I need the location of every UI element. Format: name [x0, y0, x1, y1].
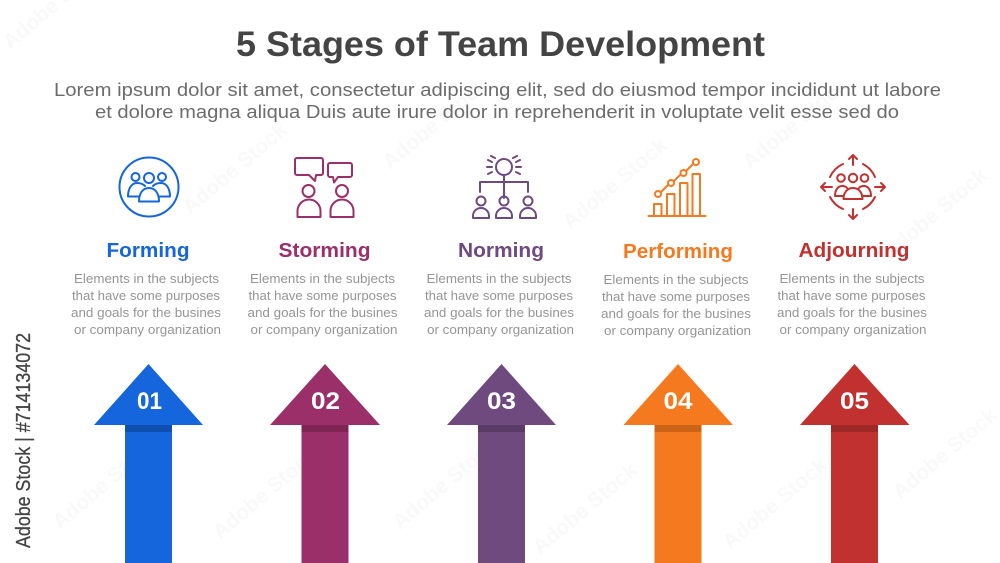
text: Adobe Stock	[718, 454, 832, 554]
panel: adjourning	[777, 155, 928, 563]
heading: performing: Performing	[623, 240, 733, 263]
arrow: 05	[800, 364, 910, 563]
description: performing: that have some purposes	[602, 289, 750, 304]
text: Adobe Stock	[378, 74, 492, 174]
description: norming	[424, 271, 575, 337]
text: Adobe Stock	[528, 459, 642, 559]
description: storming: or company organization	[250, 322, 398, 337]
heading: forming: Forming	[106, 239, 190, 262]
arrow: 03	[447, 364, 556, 563]
subtitle text: Lorem ipsum dolor sit amet, consectetur adipiscing elit, sed do eiusmod tempor incididunt ut labore	[54, 79, 941, 100]
description: adjourning: Elements in the subjects	[780, 271, 925, 286]
description: storming: Elements in the subjects	[250, 271, 396, 286]
description: forming: or company organization	[74, 322, 221, 337]
heading: storming: Storming	[278, 239, 370, 262]
description: adjourning	[777, 271, 928, 337]
description: performing: Elements in the subjects	[604, 272, 749, 287]
description: norming: Elements in the subjects	[426, 271, 572, 286]
arrow: 04: 04	[664, 388, 693, 415]
text: Adobe Stock	[558, 134, 672, 234]
arrow: 05: 05	[840, 388, 869, 415]
title: 5 Stages of Team Development	[236, 25, 765, 64]
panel: storming	[248, 158, 398, 563]
subtitle text	[54, 79, 941, 122]
text: Adobe Stock	[388, 434, 502, 534]
description: storming	[248, 271, 398, 337]
icon: growth bar chart	[648, 159, 706, 216]
description: forming	[71, 271, 222, 337]
text: Adobe Stock	[48, 434, 162, 534]
icon: team with outward arrows	[821, 155, 885, 219]
arrow: 02: 02	[311, 388, 340, 415]
description: adjourning: that have some purposes	[778, 288, 926, 303]
icon: leader and team hierarchy	[473, 156, 536, 218]
description: forming: that have some purposes	[72, 288, 220, 303]
heading: norming: Norming	[458, 239, 544, 262]
panel: forming	[71, 158, 222, 563]
description: adjourning: and goals for the busines	[777, 305, 928, 320]
panel: norming	[424, 156, 575, 563]
text: Adobe Stock	[888, 404, 1000, 504]
heading: adjourning: Adjourning	[798, 239, 910, 262]
description: forming: and goals for the busines	[71, 305, 222, 320]
description: storming: that have some purposes	[248, 288, 397, 303]
description: norming: that have some purposes	[425, 288, 573, 303]
description: norming: and goals for the busines	[424, 305, 575, 320]
icon: two people talking	[295, 158, 354, 217]
icon: team in circle	[120, 158, 178, 216]
text: Adobe Stock	[208, 444, 322, 544]
text: Adobe Stock	[878, 164, 992, 264]
arrow: 01	[94, 364, 203, 563]
subtitle text: et dolore magna aliqua Duis aute irure dolor in reprehenderit in voluptate velit esse sed do	[95, 101, 899, 122]
panel: performing	[601, 159, 752, 563]
stock credit: Adobe Stock | #714134072	[13, 333, 35, 548]
description: forming: Elements in the subjects	[74, 271, 220, 286]
arrow: 01: 01	[137, 388, 162, 415]
description: adjourning: or company organization	[780, 322, 926, 337]
arrow: 02	[270, 364, 380, 563]
text: Adobe Stock	[738, 74, 852, 174]
description: storming: and goals for the busines	[248, 305, 398, 320]
description: norming: or company organization	[427, 322, 574, 337]
arrow: 04	[624, 364, 733, 563]
text: Adobe Stock	[178, 119, 292, 219]
description: performing	[601, 272, 752, 338]
arrow: 03: 03	[487, 388, 516, 415]
description: performing: or company organization	[604, 323, 751, 338]
description: performing: and goals for the busines	[601, 306, 752, 321]
